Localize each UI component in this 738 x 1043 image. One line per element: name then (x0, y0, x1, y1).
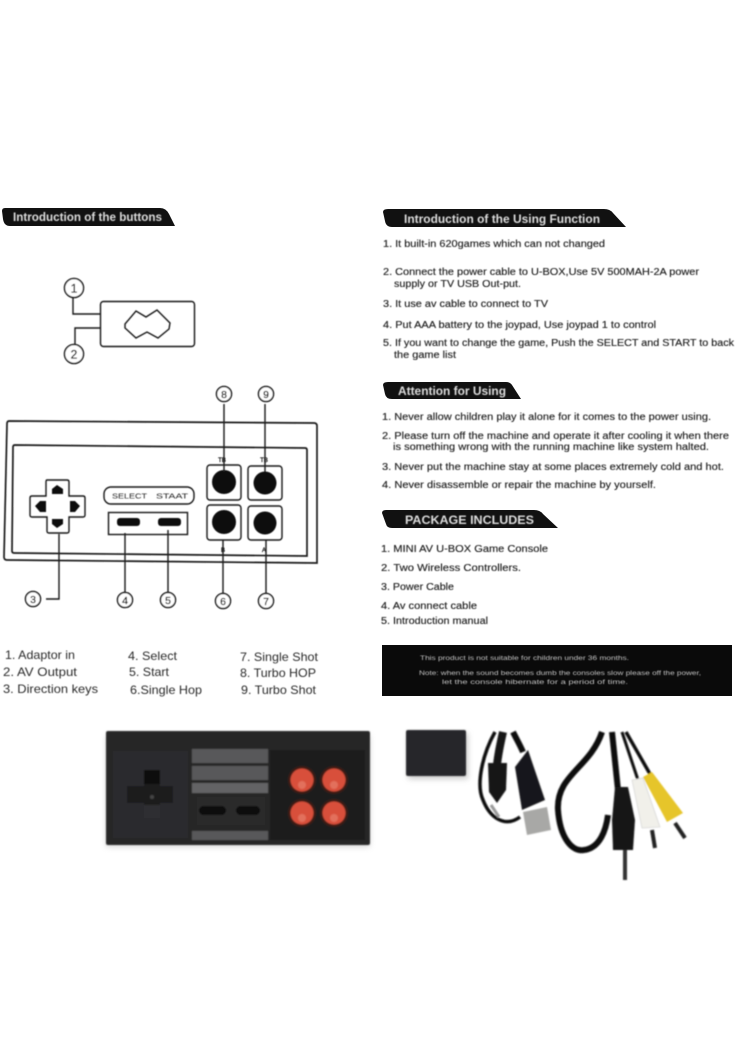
text block: attention items: 3. Never put the machine stay at some places extremely cold and hot. (382, 462, 724, 473)
text block: package contents: 2. Two Wireless Controllers. (381, 563, 521, 574)
heading: Attention for Using (383, 382, 521, 399)
photo: USB power cable (480, 732, 551, 835)
text block: using function steps: 5. If you want to change the game, Push the SELECT and START to back (383, 338, 734, 349)
diagram: adaptor console: 2 (71, 348, 78, 362)
notice panel: Note: when the sound becomes dumb the consoles slow please off the power, (419, 670, 701, 677)
heading: Introduction of the Using Function: Introduction of the Using Function (404, 212, 600, 226)
select and start labels: STAAT (156, 494, 189, 500)
action buttons: TB (260, 458, 268, 464)
text block: using function steps: supply or TV USB Out-put. (394, 279, 521, 290)
heading: Introduction of the Using Function (383, 209, 626, 227)
3.5mm plug (612, 787, 635, 850)
callout lines and numbers: 3 (30, 594, 36, 606)
legend: button names: 3. Direction keys (3, 682, 98, 696)
legend: button names: 4. Select (128, 649, 178, 663)
callout lines and numbers: 8 (221, 389, 227, 401)
text block: attention items (382, 412, 730, 491)
text block: using function steps: 2. Connect the power cable to U-BOX,Use 5V 500MAH-2A power (383, 267, 700, 278)
legend: button names: 6.Single Hop (130, 683, 202, 697)
legend: button names: 9. Turbo Shot (241, 683, 317, 697)
white RCA plug (632, 778, 660, 828)
text block: using function steps: 4. Put AAA battery to the joypad, Use joypad 1 to control (383, 320, 656, 331)
text block: using function steps: 1. It built-in 620games which can not changed (383, 239, 605, 250)
select and start buttons (108, 512, 188, 534)
text block: package contents: 5. Introduction manual (381, 616, 488, 627)
text block: package contents: 4. Av connect cable (381, 601, 478, 612)
text block: attention items: is something wrong with the running machine like system halted. (393, 442, 709, 453)
diagram: controller line drawing (4, 386, 317, 608)
callout lines and numbers: 5 (165, 595, 171, 607)
yellow RCA plug (643, 772, 683, 822)
photo: AV cable (558, 732, 685, 880)
text block: attention items: 4. Never disassemble or repair the machine by yourself. (382, 480, 656, 491)
callout lines and numbers: 7 (263, 596, 269, 608)
callout lines and numbers: 9 (263, 389, 269, 401)
text block: package contents (381, 544, 549, 627)
heading: Attention for Using: Attention for Using (398, 384, 506, 398)
legend: button names: 2. AV Output (3, 665, 78, 679)
text block: attention items: 1. Never allow children play it alone for it comes to the power using. (382, 412, 711, 423)
callout lines and numbers: 4 (122, 595, 128, 607)
select and start buttons (197, 797, 265, 825)
action buttons: A (262, 548, 266, 554)
notice panel (382, 645, 732, 696)
action buttons: TB (218, 458, 226, 464)
photo: controller (106, 731, 370, 847)
select and start labels: SELECT (112, 494, 148, 500)
text block: using function steps (383, 239, 734, 361)
heading: PACKAGE INCLUDES (382, 510, 558, 528)
callout lines and numbers (26, 386, 274, 608)
legend: button names: 5. Start (129, 665, 170, 679)
heading: Introduction of the buttons (2, 208, 175, 226)
text block: attention items: 2. Please turn off the machine and operate it after cooling it when there (382, 431, 730, 442)
d-pad (127, 770, 173, 818)
legend: button names: 1. Adaptor in (5, 648, 75, 662)
diagram: adaptor console: 1 (71, 282, 78, 296)
action buttons (207, 458, 282, 554)
callout lines and numbers: 6 (220, 596, 226, 608)
heading: Introduction of the buttons: Introduction of the buttons (13, 212, 162, 224)
notice panel: let the console hibernate for a period of time. (442, 679, 628, 686)
diagram: adaptor console (64, 278, 194, 364)
red buttons (288, 766, 348, 827)
photo: console unit (406, 730, 468, 779)
action buttons: B (221, 548, 225, 554)
text block: package contents: 1. MINI AV U-BOX Game Console (381, 544, 549, 555)
legend: button names: 8. Turbo HOP (240, 666, 316, 680)
text block: using function steps: the game list (394, 350, 456, 361)
notice panel: This product is not suitable for children under 36 months. (420, 655, 629, 662)
legend: button names (3, 648, 319, 697)
select and start labels (104, 487, 194, 504)
text block: using function steps: 3. It use av cable to connect to TV (383, 299, 549, 310)
heading: PACKAGE INCLUDES: PACKAGE INCLUDES (405, 513, 534, 527)
d-pad (30, 480, 85, 533)
text block: package contents: 3. Power Cable (381, 582, 455, 593)
legend: button names: 7. Single Shot (240, 650, 319, 664)
